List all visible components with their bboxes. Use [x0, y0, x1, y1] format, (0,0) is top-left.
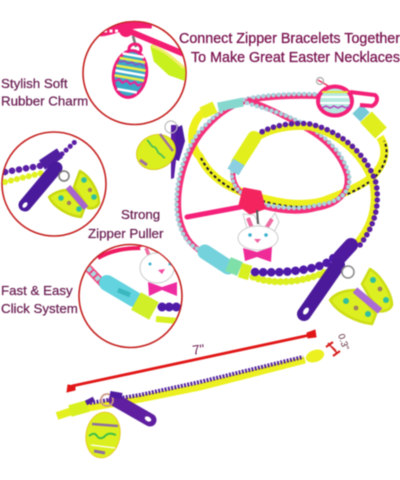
- panel: zipper puller detail circle: [2, 132, 106, 236]
- callout: click system label: Fast & Easy: [1, 283, 73, 298]
- callout: zipper puller label: Strong: [121, 207, 160, 222]
- clasps: colored click connectors: [202, 102, 381, 273]
- measure: 7 inch red line: [67, 330, 316, 392]
- product: single straight zipper bracelet: [57, 347, 326, 461]
- panel: click system detail circle: [79, 244, 182, 348]
- charm: yellow egg with purple puller: [131, 121, 185, 179]
- callout: zipper puller label: Zipper Puller: [88, 226, 164, 241]
- bracelet: yellow and black chain: [192, 112, 387, 207]
- measure: 7 inch red line: 7": [191, 341, 206, 358]
- measure: 0.3 inch width marker: 0.3": [335, 333, 351, 352]
- heading: Connect Zipper Bracelets Together: [179, 31, 400, 47]
- callout: rubber charm label: Rubber Charm: [1, 94, 88, 108]
- charm: striped egg on bracelet: [316, 78, 377, 118]
- callout: rubber charm label: Stylish Soft: [1, 76, 68, 91]
- callout: click system label: Click System: [1, 301, 78, 316]
- heading: To Make Great Easter Necklaces: [191, 50, 400, 66]
- bracelet: pink and light blue chain: [176, 94, 350, 252]
- measure: 0.3 inch width marker: [326, 333, 351, 356]
- pink knot and bar: [187, 189, 264, 217]
- bracelet: second pink and blue chain: [232, 100, 349, 211]
- panel: charm detail circle: [83, 22, 186, 124]
- heading: [179, 31, 400, 66]
- zipper slider and butterfly charm: [302, 245, 392, 324]
- bracelet: purple and yellow chain with top clasp: [253, 123, 377, 282]
- charm: bunny with bow: [238, 210, 279, 262]
